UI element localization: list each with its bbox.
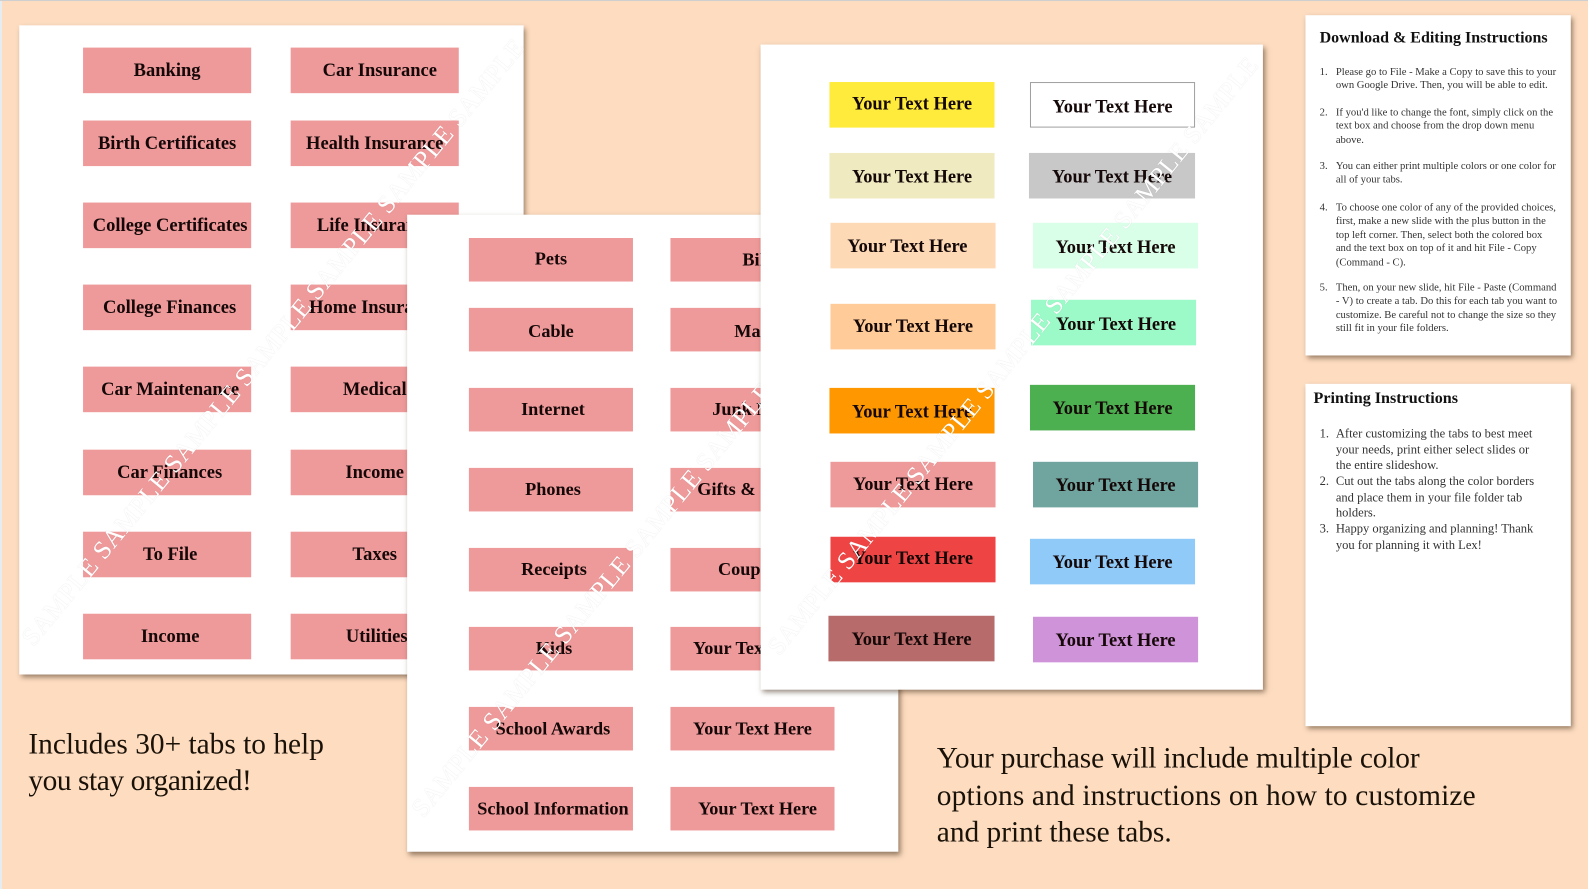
text: step 2 [1320,107,1553,146]
tab: Pets [469,238,633,282]
tab: Income [83,614,251,659]
caption: tab count: you stay organized! [28,765,251,797]
caption: purchase details [937,742,1476,849]
tab: Your Text Here: Your Text Here [693,638,812,658]
tab: Income: Income [345,462,404,482]
tab: To File: To File [143,544,197,564]
tab: Coupons: Coupons [718,559,787,579]
tab: Health Insurance [291,121,459,166]
text: step 4: first, make a new slide with the plus button in the [1336,216,1546,227]
text: step 1: the entire slideshow. [1336,458,1439,472]
tab: Home Insurance: Home Insurance [309,297,440,317]
panel: pink tabs sheet, household [407,215,898,852]
tab: orange: Your Text Here [852,401,972,421]
panel: color options sheet [761,45,1263,690]
text: step 3: 3. [1320,161,1328,172]
tab: Coupons [670,548,835,591]
tab: gray: Your Text Here [1052,166,1172,186]
tab: red [830,537,996,582]
text: step 1: 1. [1320,67,1328,78]
tab: Mail [670,308,835,351]
text: step 5: Then, on your new slide, hit File - Paste (Command [1336,283,1556,294]
tab: School Awards [469,707,633,750]
tab: Your Text Here [670,787,835,830]
tab: School Awards: School Awards [496,718,610,738]
tab: Taxes [291,532,459,577]
text: step 1: 1. [1320,426,1329,441]
tab: beige [829,153,995,199]
tab: Car Finances: Car Finances [117,462,222,482]
tab: mint green: Your Text Here [1056,314,1176,334]
tab: Cable: Cable [528,321,574,341]
text: step 3 [1320,161,1556,186]
tab: Cable [469,308,633,351]
heading: printing instructions: Printing Instructions [1314,390,1458,407]
tab: Receipts: Receipts [521,559,587,579]
tab: yellow [829,82,995,128]
text: step 4: To choose one color of any of the provided choices, [1336,203,1556,214]
tab: Income: Income [141,626,199,646]
tab: Car Maintenance [83,367,251,412]
tab: rose brown: Your Text Here [851,629,972,649]
tab: light blue: Your Text Here [1052,552,1173,572]
text: step 1: After customizing the tabs to best meet [1336,426,1532,441]
tab: Home Insurance [291,285,459,330]
text: step 3: you for planning it with Lex! [1336,537,1482,552]
tab: Life Insurance: Life Insurance [317,215,433,235]
tab: Medical: Medical [343,379,407,399]
text: step 4: and the text box on top of it and hit File - Copy [1336,243,1537,254]
tab: Kids [469,627,633,670]
tab: Car Insurance [291,48,459,93]
tab: teal [1033,462,1198,507]
text: step 1: your needs, print either select slides or [1336,442,1529,456]
tab: Internet [469,388,633,431]
tab: College Certificates [83,203,251,248]
panel: pink tabs sheet, financial [19,25,524,674]
tab: Car Insurance: Car Insurance [323,60,437,80]
tab: Medical [291,367,459,412]
tab: purple: Your Text Here [1056,630,1176,650]
tab: Utilities [291,614,459,659]
panel: download and editing instructions [1305,15,1571,355]
text: step 1 [1320,67,1556,92]
text: step 2: Cut out the tabs along the color borders [1336,474,1534,488]
tab: Kids: Kids [536,638,572,658]
text: step 3: You can either print multiple colors or one color for [1336,161,1556,172]
tab: yellow: Your Text Here [852,93,972,113]
tab: College Certificates: College Certificates [93,215,248,235]
tab: School Information [469,787,633,830]
text: step 5: - V) to create a tab. Do this for each tab you want to [1336,296,1557,307]
tab: white outline: Your Text Here [1052,96,1173,116]
tab: peach [830,223,996,268]
tab: light orange: Your Text Here [853,316,973,336]
tab: School Information: School Information [477,798,629,818]
tab: Gifts & Cards: Gifts & Cards [697,479,808,499]
tab: purple [1033,617,1198,662]
tab: Bills: Bills [742,249,777,269]
text: step 3: all of your tabs. [1336,175,1403,186]
text: step 1: own Google Drive. Then, you will be able to edit. [1336,80,1548,92]
text: step 3: 3. [1320,522,1329,536]
tab: gray [1029,153,1195,199]
tab: College Finances [83,285,251,330]
tab: Junk Mail [670,388,835,431]
tab: Phones [469,468,633,511]
text: step 1 [1320,426,1532,472]
tab: pink [830,462,996,507]
tab: Birth Certificates [83,121,251,166]
tab: pale mint [1033,223,1198,268]
panel: printing instructions [1305,384,1571,726]
tab: pale mint: Your Text Here [1056,237,1176,257]
text: step 2: If you'd like to change the font, simply click on the [1336,107,1553,118]
tab: Your Text Here [670,627,835,670]
tab: Receipts [469,548,633,591]
tab: mint green [1031,300,1196,345]
tab: Your Text Here: Your Text Here [693,718,812,738]
caption: tab count [28,728,324,797]
tab: Utilities: Utilities [346,626,408,646]
tab: Birth Certificates: Birth Certificates [98,133,236,153]
tab: Gifts & Cards [670,468,835,511]
tab: Phones: Phones [525,479,581,499]
text: step 3: Happy organizing and planning! Thank [1336,522,1533,536]
tab: Taxes: Taxes [352,544,397,564]
tab: orange [829,388,995,433]
tab: Life Insurance [291,203,459,248]
tab: red: Your Text Here [853,548,973,568]
text: step 3 [1320,522,1534,552]
text: step 4: 4. [1320,203,1328,214]
text: step 2: 2. [1320,474,1329,488]
text: step 5: customize. Be careful not to change the size so they [1336,310,1556,321]
caption: tab count: Includes 30+ tabs to help [28,728,324,760]
tab: Internet: Internet [521,399,585,419]
tab: Your Text Here [670,707,835,750]
tab: pink: Your Text Here [853,474,973,494]
tab: Income [291,450,459,495]
caption: purchase details: and print these tabs. [937,816,1172,849]
text: step 2: text box and choose from the drop down menu [1336,121,1534,132]
tab: Your Text Here: Your Text Here [698,798,817,818]
text: step 1: Please go to File - Make a Copy to save this to your [1336,67,1556,78]
text: step 4: (Command - C). [1336,257,1406,268]
tab: teal: Your Text Here [1056,475,1176,495]
tab: Banking [83,48,251,93]
tab: green: Your Text Here [1052,398,1173,418]
tab: Pets: Pets [535,248,567,268]
heading: download and editing: Download & Editing Instructions [1320,29,1548,47]
text: step 2: above. [1336,135,1364,146]
text: step 5: 5. [1320,283,1328,294]
tab: Junk Mail: Junk Mail [712,399,793,419]
text: step 2 [1320,474,1534,520]
text: step 5 [1320,283,1557,334]
tab: rose brown [828,616,995,661]
text: step 2: holders. [1336,506,1376,520]
tab: Car Finances [83,450,251,495]
tab: peach: Your Text Here [847,236,967,256]
tab: To File [83,532,251,577]
tab: light orange [830,304,996,349]
tab: Mail: Mail [734,321,771,341]
tab: green [1030,385,1195,430]
caption: purchase details: Your purchase will include multiple color [937,742,1419,775]
tab: light blue [1030,539,1195,584]
tab: beige: Your Text Here [852,166,972,186]
text: step 4 [1320,203,1556,268]
tab: Health Insurance: Health Insurance [306,133,443,153]
watermark: SAMPLE SAMPLE SAMPLE SAMPLE SAMPLE SAMPLE SAMPLE [19,33,524,651]
tab: College Finances: College Finances [103,297,236,317]
text: step 2: 2. [1320,107,1328,118]
tab: white outline [1030,82,1195,128]
caption: purchase details: options and instructions on how to customize [937,779,1476,812]
watermark: SAMPLE SAMPLE SAMPLE SAMPLE SAMPLE SAMPLE SAMPLE [763,52,1263,660]
tab: Bills [670,238,835,282]
text: step 2: and place them in your file folder tab [1336,490,1522,504]
text: step 5: still fit in your file folders. [1336,323,1449,334]
tab: Car Maintenance: Car Maintenance [101,379,239,399]
tab: Banking: Banking [134,60,201,80]
text: step 4: top left corner. Then, select both the colored box [1336,230,1542,241]
